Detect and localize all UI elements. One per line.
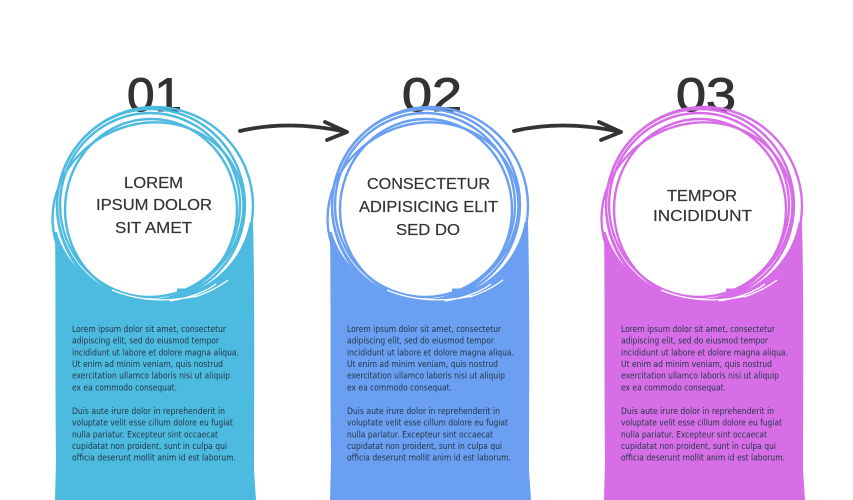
body text: step 2: Ut enim ad minim veniam, quis nostrud <box>347 360 498 370</box>
body text: step 3: Lorem ipsum dolor sit amet, consectetur <box>621 325 775 335</box>
heading: step 2: CONSECTETUR <box>367 176 490 193</box>
body text: step 3: cupidatat non proident, sunt in culpa qui <box>621 442 776 452</box>
heading: step 2: SED DO <box>396 222 460 239</box>
body text: step 1: exercitation ullamco laboris nisi ut aliquip <box>72 372 230 382</box>
arrow: step 1 to 2 <box>240 122 347 140</box>
body text: step 3: voluptate velit esse cillum dolore eu fugiat <box>621 419 783 429</box>
body text: step 2: incididunt ut labore et dolore magna aliqua. <box>347 348 514 358</box>
panel: step 1 <box>23 68 273 500</box>
body text: step 2: Duis aute irure dolor in reprehenderit in <box>347 407 500 417</box>
body text: step 3: Ut enim ad minim veniam, quis nostrud <box>621 360 772 370</box>
body text: step 1: Ut enim ad minim veniam, quis nostrud <box>72 360 223 370</box>
body text: step 2: voluptate velit esse cillum dolore eu fugiat <box>347 419 509 429</box>
panel: step 2 <box>298 68 548 500</box>
body text: step 2: Lorem ipsum dolor sit amet, consectetur <box>347 325 501 335</box>
number: 02: 02 <box>402 68 462 121</box>
body text: step 1: Lorem ipsum dolor sit amet, consectetur <box>72 325 226 335</box>
panel background: step 2 <box>330 222 531 500</box>
body text: step 1: ex ea commodo consequat. <box>72 383 177 393</box>
number: 01: 01 <box>127 68 182 121</box>
heading: step 1: SIT AMET <box>115 220 193 237</box>
body text: step 1: voluptate velit esse cillum dolore eu fugiat <box>72 419 234 429</box>
body text: step 3: adipiscing elit, sed do eiusmod tempor <box>621 337 768 347</box>
body text: step 3: ex ea commodo consequat. <box>621 383 726 393</box>
body text: step 1: Duis aute irure dolor in reprehenderit in <box>72 407 225 417</box>
body text: step 3: exercitation ullamco laboris nisi ut aliquip <box>621 372 779 382</box>
panel: step 3 <box>572 68 822 500</box>
body text: step 1: adipiscing elit, sed do eiusmod tempor <box>72 337 219 347</box>
heading: step 1: LOREM <box>124 175 183 192</box>
heading: step 1: IPSUM DOLOR <box>96 197 212 214</box>
number: 03: 03 <box>676 68 736 121</box>
scribbled circle: step 2 <box>298 91 548 333</box>
body text: step 2: officia deserunt mollit anim id est laborum. <box>347 454 511 464</box>
body text: step 1: incididunt ut labore et dolore magna aliqua. <box>72 348 239 358</box>
heading: step 3: INCIDIDUNT <box>653 208 753 225</box>
scribbled circle: step 3 <box>572 91 822 333</box>
body text: step 3: officia deserunt mollit anim id est laborum. <box>621 454 785 464</box>
body text: step 3: Duis aute irure dolor in reprehenderit in <box>621 407 774 417</box>
body text: step 1: officia deserunt mollit anim id est laborum. <box>72 454 236 464</box>
body text: step 3: incididunt ut labore et dolore magna aliqua. <box>621 348 788 358</box>
body text: step 2: cupidatat non proident, sunt in culpa qui <box>347 442 502 452</box>
body text: step 2: adipiscing elit, sed do eiusmod tempor <box>347 337 494 347</box>
heading: step 3: TEMPOR <box>667 188 737 205</box>
body text: step 2: nulla pariatur. Excepteur sint occaecat <box>347 430 494 440</box>
body text: step 1: cupidatat non proident, sunt in culpa qui <box>72 442 227 452</box>
body text: step 2: ex ea commodo consequat. <box>347 383 452 393</box>
scribbled circle: step 1 <box>23 91 273 333</box>
body text: step 3: nulla pariatur. Excepteur sint occaecat <box>621 430 768 440</box>
heading: step 2: ADIPISICING ELIT <box>359 199 499 216</box>
body text: step 2: exercitation ullamco laboris nisi ut aliquip <box>347 372 505 382</box>
panel background: step 1 <box>55 222 256 500</box>
body text: step 1: nulla pariatur. Excepteur sint occaecat <box>72 430 219 440</box>
panel background: step 3 <box>604 222 805 500</box>
arrow: step 2 to 3 <box>514 122 621 140</box>
